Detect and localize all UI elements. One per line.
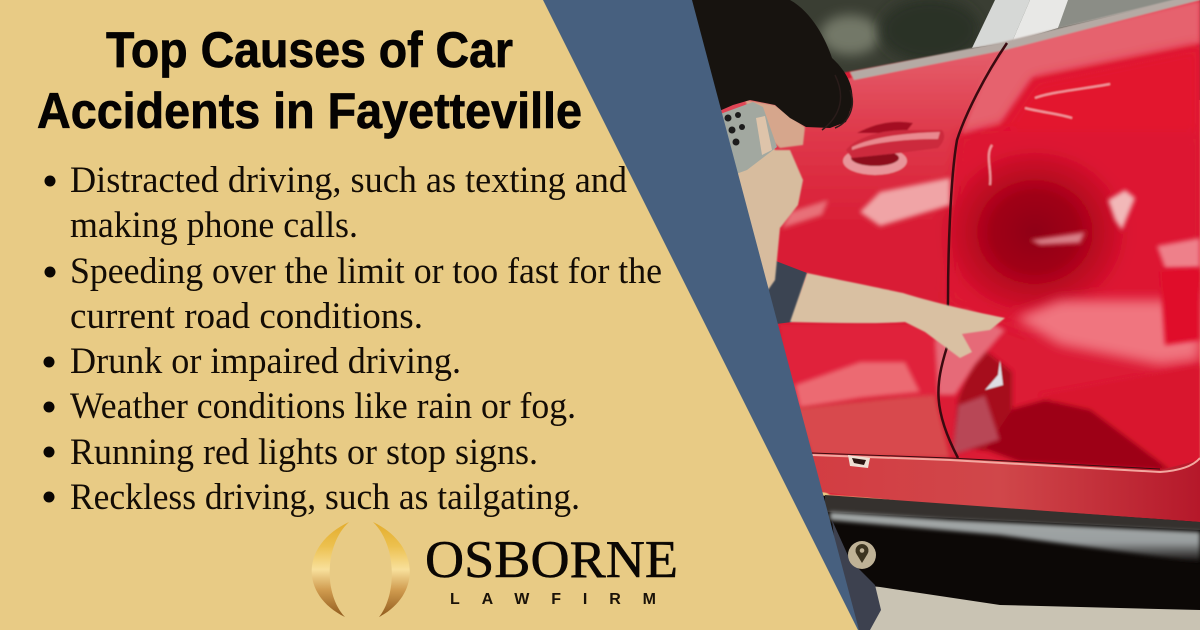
bullet: weather: Weather conditions like rain or fog. [70, 386, 576, 427]
title: Accidents in Fayetteville [37, 83, 582, 139]
logo: Osborne Law Firm [312, 522, 678, 617]
title [37, 22, 582, 139]
lower left door panel [780, 325, 945, 408]
car body [700, 0, 1200, 520]
bullet: distracted driving: making phone calls. [70, 205, 358, 246]
panel: blue diagonal band [540, 0, 859, 630]
bullet: drunk driving: Drunk or impaired driving. [70, 341, 461, 382]
ground and shadow under car [800, 495, 1200, 630]
sill and rocker panel [800, 453, 1200, 522]
icon: map pin badge [848, 541, 876, 569]
panel: cream text area [0, 0, 858, 630]
door handle [843, 122, 944, 175]
tagline: LAWFIRM [450, 591, 656, 608]
arm [790, 273, 1005, 358]
bullet: red lights: Running red lights or stop signs. [70, 432, 538, 473]
hair [690, 0, 853, 130]
bullet: distracted driving [44, 160, 627, 246]
forearm and hand [730, 125, 803, 290]
list of causes [44, 160, 662, 518]
fingers [756, 116, 772, 155]
phone [712, 102, 777, 178]
shirt [765, 258, 807, 324]
photo: man on phone inspecting a damaged red car [680, 0, 1200, 630]
bullet: reckless driving: Reckless driving, such as tailgating. [70, 477, 580, 518]
dent highlights [1015, 290, 1200, 365]
title: Top Causes of Car [106, 22, 513, 78]
phone cameras [724, 112, 745, 146]
trousers [832, 520, 881, 630]
photo background: trees [680, 0, 1200, 100]
damage streaks on door [860, 178, 950, 226]
bullet: speeding [44, 251, 662, 337]
bullet: distracted driving: Distracted driving, such as texting and [70, 160, 627, 201]
person: hair, face, phone, hand, arm [690, 0, 1005, 630]
icon: gold O crescents [312, 522, 410, 617]
face [745, 100, 805, 148]
wordmark: OSBORNE [425, 531, 678, 589]
bullet: speeding: current road conditions. [70, 296, 423, 337]
bullet: speeding: Speeding over the limit or too fast for the [70, 251, 662, 292]
car windows [972, 0, 1180, 48]
roof rail [850, 0, 1200, 80]
door seam [938, 43, 1007, 458]
